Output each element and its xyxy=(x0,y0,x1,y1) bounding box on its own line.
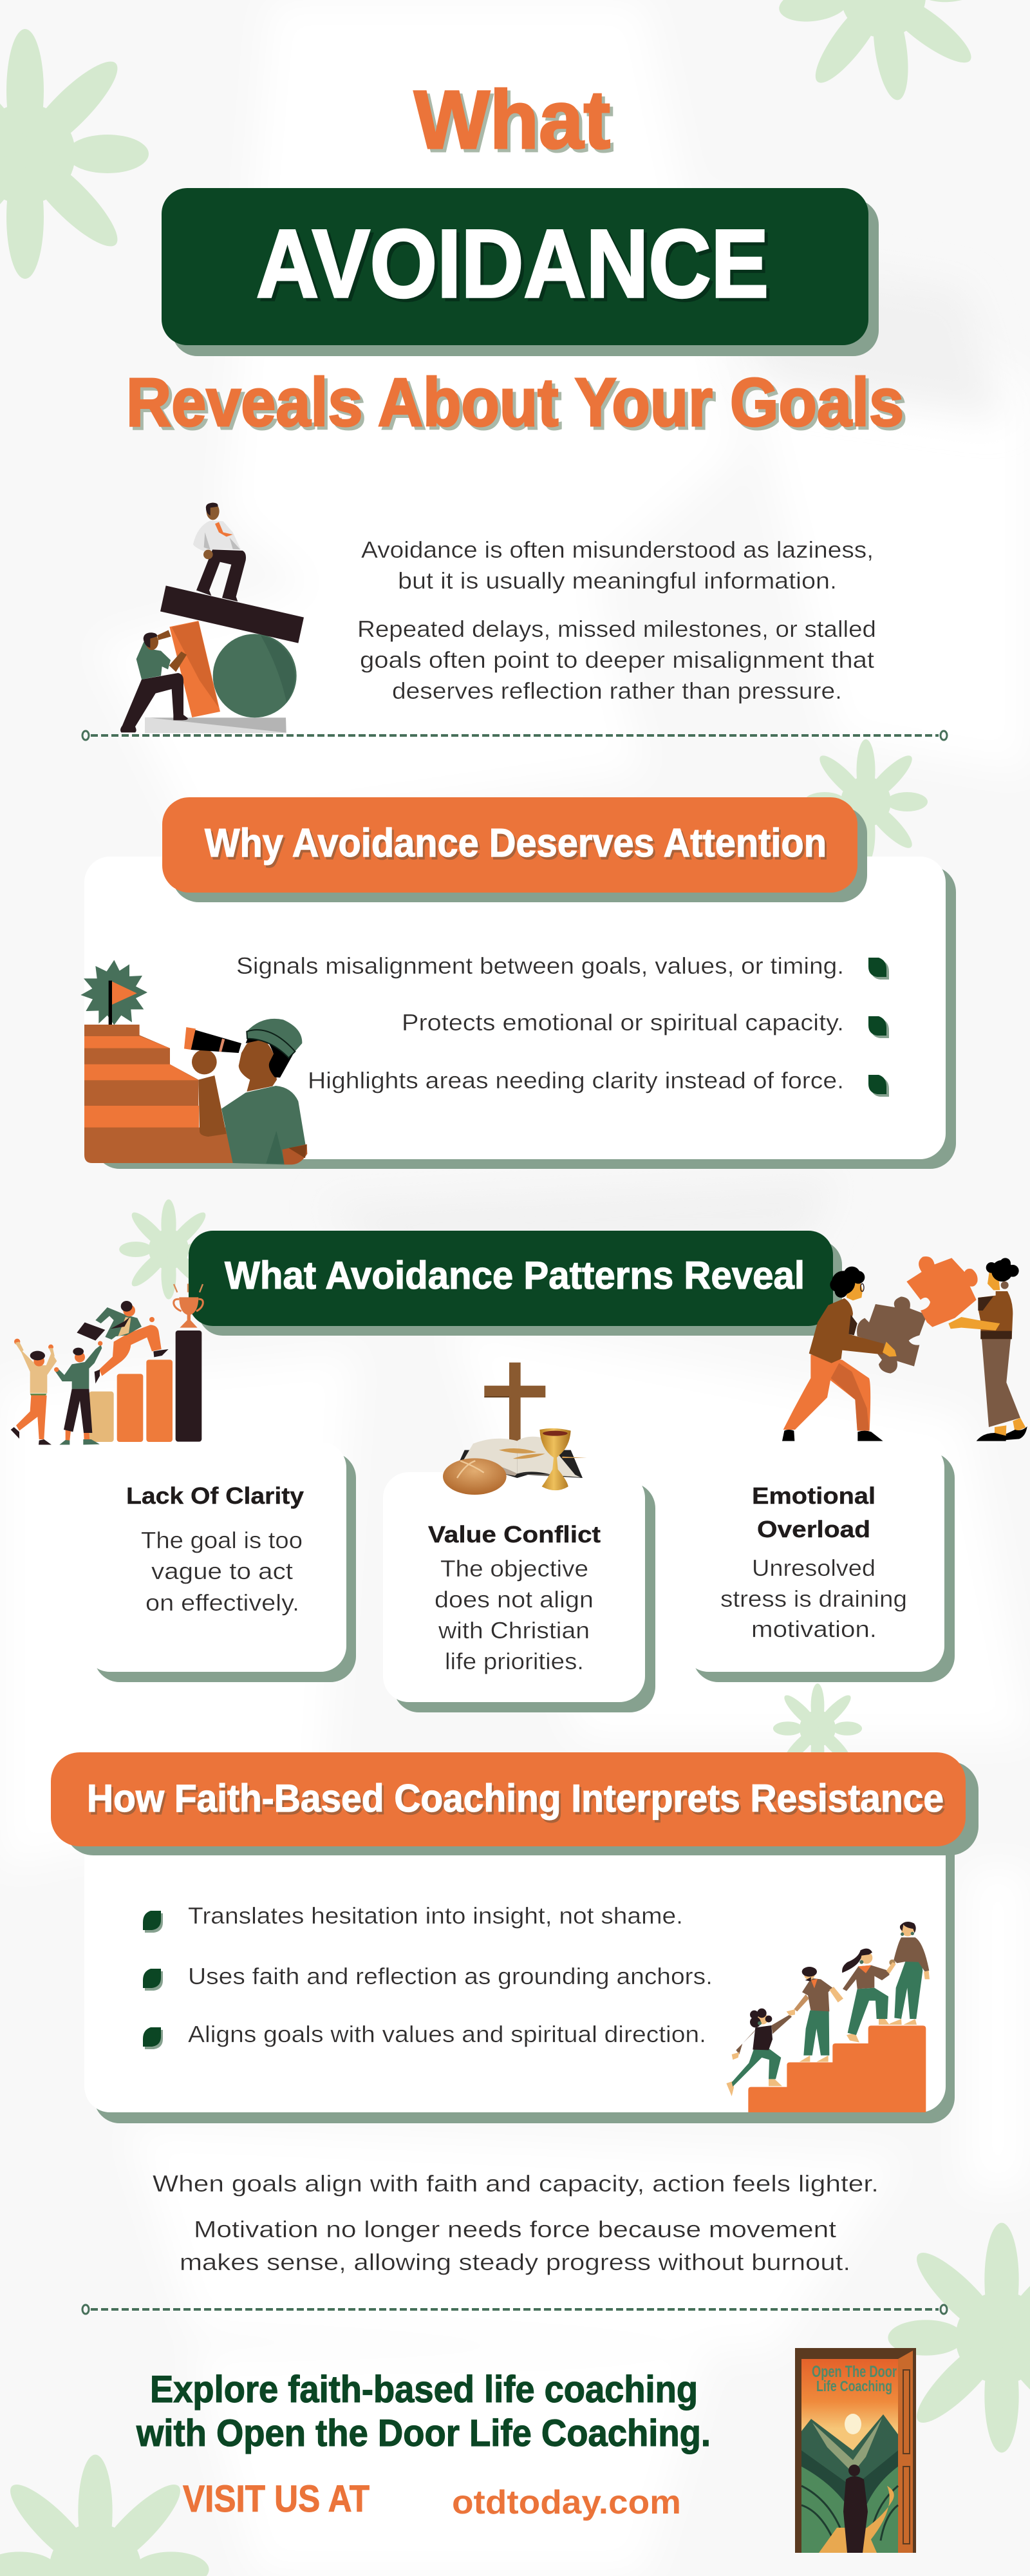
panel: value conflict xyxy=(383,1472,655,1712)
list text: Translates hesitation into insight, not shame. xyxy=(188,1902,683,1929)
list text xyxy=(188,1902,713,2047)
intro text: goals often point to deeper misalignment that xyxy=(360,647,874,673)
decorative flower: bottom right xyxy=(888,2223,1030,2452)
panel: lack of clarity xyxy=(84,1442,356,1682)
bullet icons xyxy=(868,958,889,1097)
header: how faith-based coaching interprets resistance: How Faith-Based Coaching Interprets Resistance xyxy=(87,1777,944,1820)
closing text xyxy=(153,2170,879,2275)
intro text: Repeated delays, missed milestones, or stalled xyxy=(357,616,876,642)
illustration: people helping each other up stairs xyxy=(726,1922,930,2112)
logo text xyxy=(812,2363,897,2394)
illustration: people climbing bar chart to trophy xyxy=(11,1283,203,1444)
card title: Lack Of Clarity xyxy=(126,1482,304,1509)
call to action xyxy=(136,2369,711,2454)
decorative flower: bottom left xyxy=(0,2455,209,2576)
card body: vague to act xyxy=(151,1558,293,1584)
panel: how faith-based coaching interprets resistance xyxy=(51,1752,979,2123)
panel: emotional overload xyxy=(683,1442,955,1682)
decorative flower: behind first header xyxy=(804,739,928,864)
title xyxy=(126,74,904,440)
card body xyxy=(720,1555,907,1642)
card body: The objective xyxy=(440,1555,588,1582)
intro text: but it is usually meaningful information. xyxy=(398,567,837,594)
card body: does not align xyxy=(435,1586,594,1613)
header: how faith-based coaching interprets resistance xyxy=(51,1752,979,1855)
title banner: Avoidance: AVOIDANCE xyxy=(256,209,769,317)
card body xyxy=(141,1527,303,1616)
decorative flower: top left xyxy=(0,29,149,279)
title line: What: What xyxy=(414,74,610,166)
illustration: puzzle pieces held by two people xyxy=(782,1256,1027,1441)
list text: Signals misalignment between goals, values, or timing. xyxy=(236,952,844,979)
website: otdtoday.com xyxy=(452,2484,681,2521)
header: what avoidance patterns reveal: What Avoidance Patterns Reveal xyxy=(225,1254,805,1297)
divider bottom xyxy=(82,2305,947,2314)
logo: open door with landscape xyxy=(795,2348,916,2553)
panel: why avoidance deserves attention xyxy=(80,797,956,1169)
illustration: cross, open bible, bread and chalice xyxy=(443,1363,587,1495)
card title: Overload xyxy=(757,1516,870,1542)
list text: Aligns goals with values and spiritual direction. xyxy=(188,2021,706,2047)
card background xyxy=(84,857,956,1169)
card body: with Christian xyxy=(438,1617,590,1643)
call to action: Explore faith-based life coaching xyxy=(150,2369,698,2410)
card body: life priorities. xyxy=(445,1648,584,1674)
card body: stress is draining xyxy=(720,1586,907,1612)
title line: Reveals About Your Goals: Reveals About Your Goals xyxy=(126,365,904,440)
intro text xyxy=(357,536,876,704)
bullet icons xyxy=(143,1911,163,2049)
call to action: with Open the Door Life Coaching. xyxy=(136,2412,711,2454)
card body: motivation. xyxy=(751,1616,877,1642)
card title: Emotional xyxy=(752,1482,876,1509)
list text xyxy=(236,952,844,1094)
card body xyxy=(435,1555,594,1674)
header: why avoidance deserves attention xyxy=(162,797,867,902)
card body: Unresolved xyxy=(752,1555,876,1581)
logo text: Life Coaching xyxy=(816,2378,892,2394)
card title xyxy=(752,1482,876,1542)
decorative flower: top right xyxy=(764,0,1002,115)
decorative flower: above third header xyxy=(773,1683,862,1774)
list text: Uses faith and reflection as grounding anchors. xyxy=(188,1963,713,1989)
card title: Value Conflict xyxy=(428,1521,601,1548)
header: what avoidance patterns reveal xyxy=(189,1231,842,1336)
card body: on effectively. xyxy=(145,1589,299,1616)
closing text: Motivation no longer needs force because movement xyxy=(194,2216,836,2242)
closing text: When goals align with faith and capacity, action feels lighter. xyxy=(153,2170,879,2197)
header: why avoidance deserves attention: Why Avoidance Deserves Attention xyxy=(205,821,827,866)
title banner: Avoidance xyxy=(162,188,879,356)
closing text: makes sense, allowing steady progress without burnout. xyxy=(180,2249,850,2275)
card background xyxy=(84,1797,955,2123)
illustration: person with telescope on stairs xyxy=(80,960,307,1164)
intro text: Avoidance is often misunderstood as laziness, xyxy=(361,536,874,563)
visit us label: VISIT US AT xyxy=(183,2478,370,2520)
decorative flower: behind second header xyxy=(119,1199,218,1300)
list text: Protects emotional or spiritual capacity. xyxy=(402,1009,844,1036)
list text: Highlights areas needing clarity instead of force. xyxy=(308,1067,844,1094)
intro text: deserves reflection rather than pressure. xyxy=(392,677,842,704)
card body: The goal is too xyxy=(141,1527,303,1553)
divider top xyxy=(82,731,947,740)
illustration: people balancing a plank on a ball xyxy=(120,503,304,733)
logo text: Open The Door xyxy=(812,2363,897,2381)
